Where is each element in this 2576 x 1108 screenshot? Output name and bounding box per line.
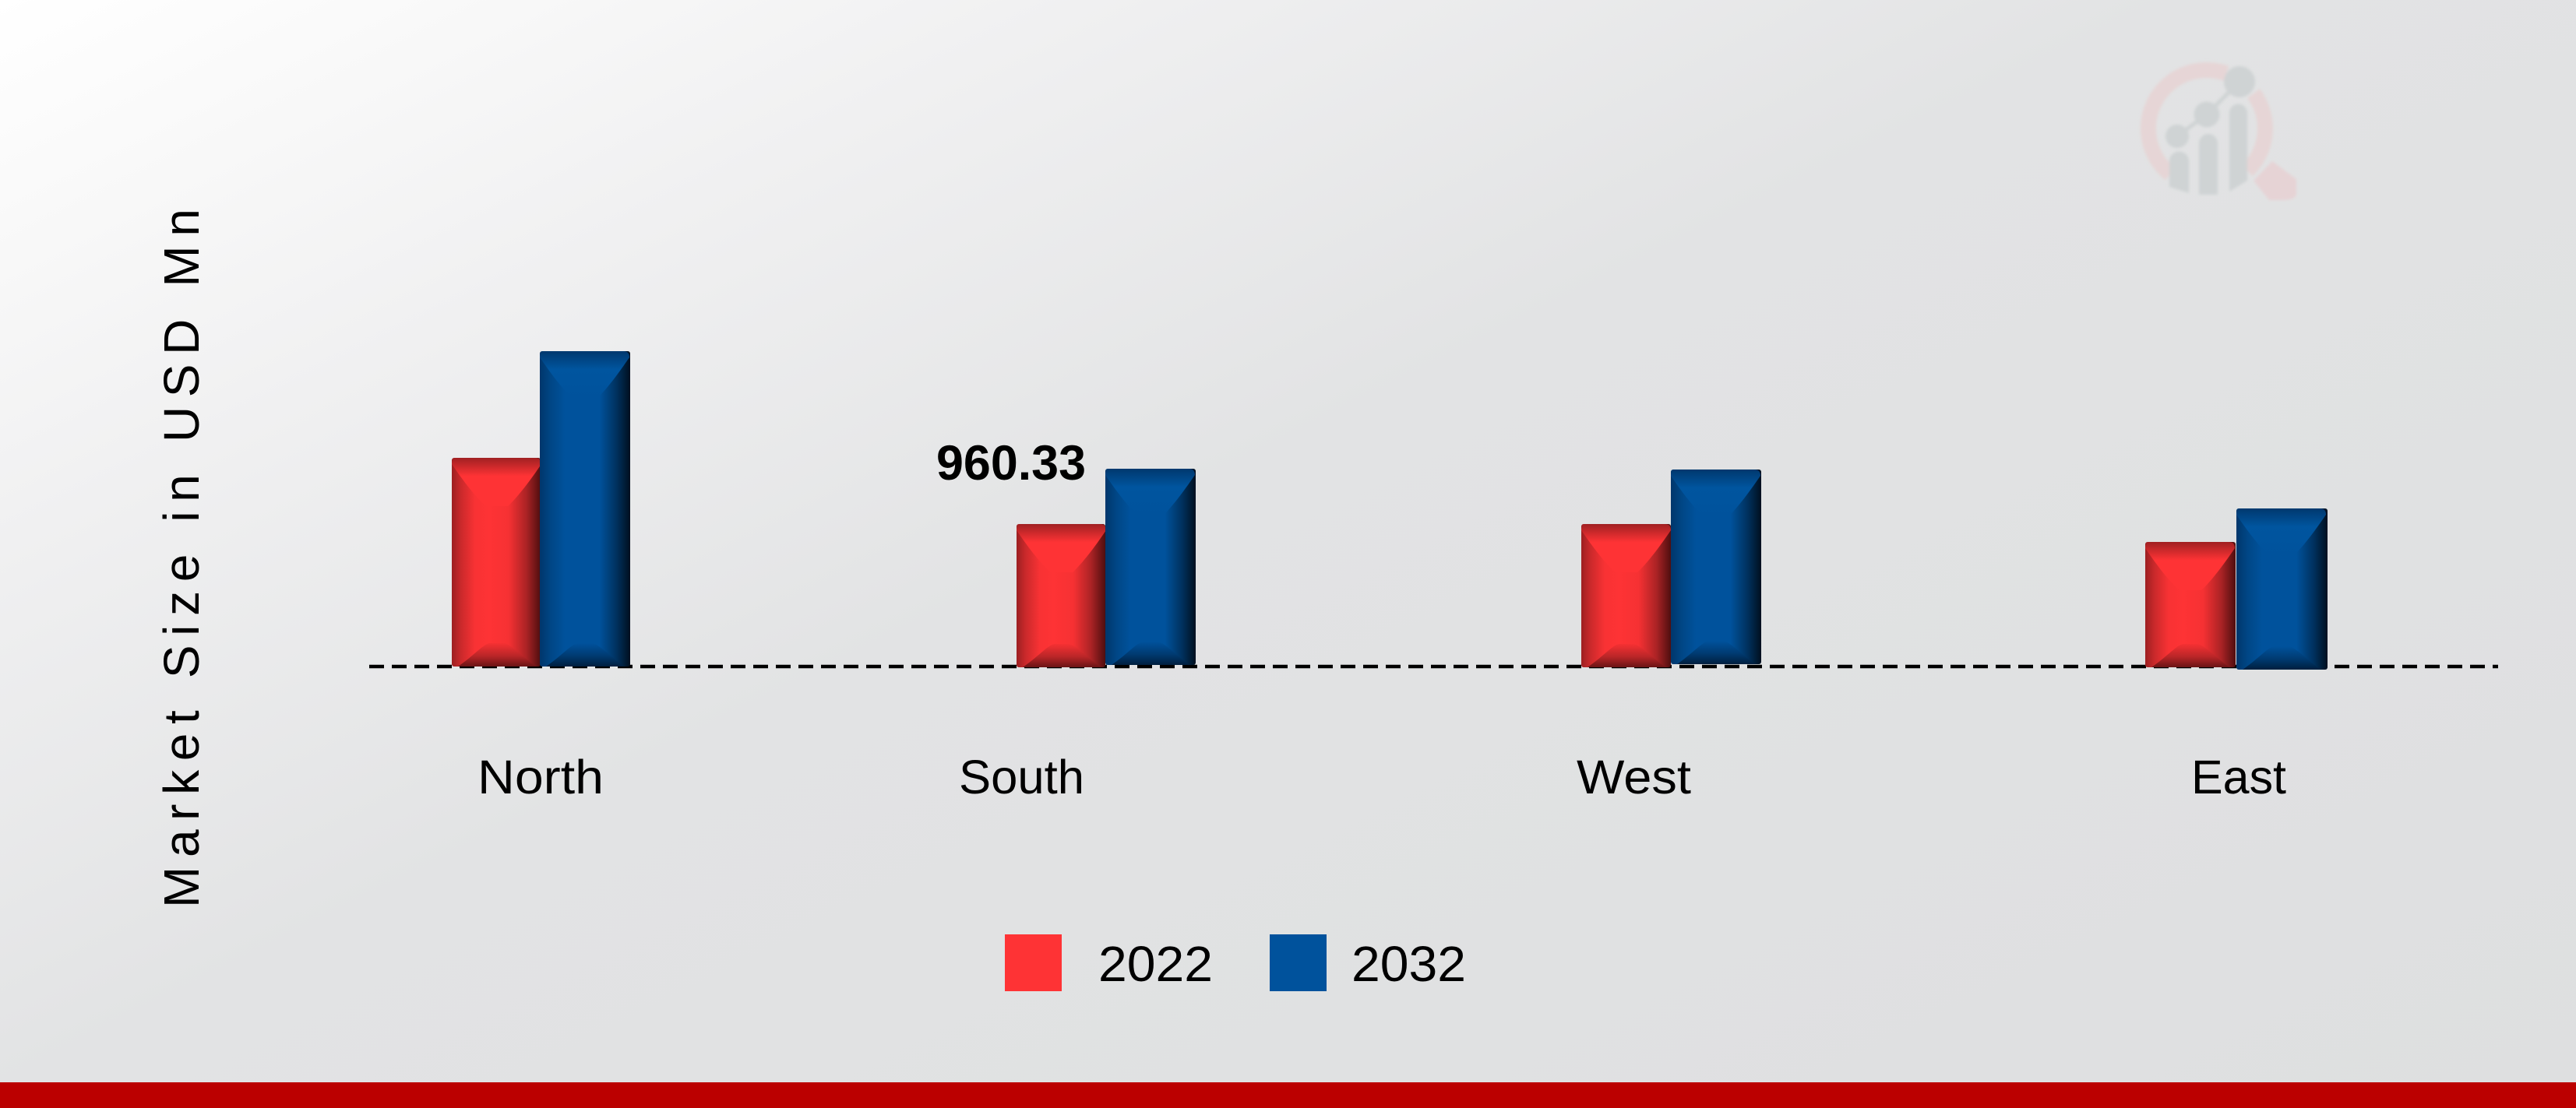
value label: South 2022: 960.33 [936,436,1086,491]
y-axis title: Market Size in USD Mn [153,209,210,908]
baseline: dashed axis [369,665,2498,668]
bar: East 2022 [2145,542,2236,667]
bar: West 2022 [1581,524,1671,667]
category label: North: North [477,751,604,804]
category label: West: West [1577,751,1691,804]
bar: East 2032 [2236,508,2328,670]
bar group: North [452,351,630,667]
bar: West 2032 [1671,470,1761,664]
legend label: 2032: 2032 [1351,936,1466,992]
bar: North 2022 [452,458,541,667]
bar: South 2022 [1017,524,1106,667]
footer bar [0,1082,2576,1108]
legend [1005,934,1466,992]
category label: South: South [959,751,1084,804]
legend swatch: 2032 [1270,934,1327,991]
legend label: 2022: 2022 [1098,936,1213,992]
bar: South 2032 [1105,469,1196,665]
bar: North 2032 [540,351,630,667]
bar group: East [2145,508,2328,670]
watermark logo icon [2148,66,2296,200]
bar group: South [1017,469,1196,667]
category label: East: East [2191,751,2286,804]
legend swatch: 2022 [1005,934,1062,991]
bar group: West [1581,470,1761,667]
